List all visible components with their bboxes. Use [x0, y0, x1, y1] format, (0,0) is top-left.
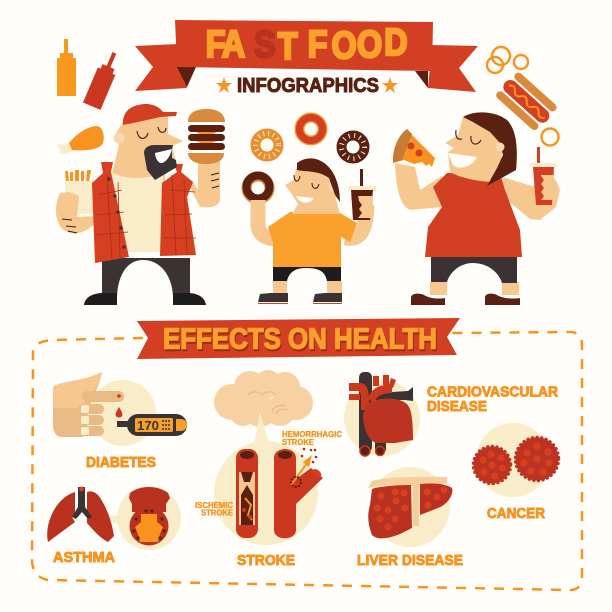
woman cup: [530, 147, 558, 205]
label: liver disease: LIVER DISEASE: [357, 553, 463, 569]
panel: liver disease: [368, 467, 452, 547]
left artery: [236, 449, 258, 538]
right artery: [274, 448, 323, 538]
man eyes: [137, 127, 166, 138]
woman eyes: [456, 130, 481, 144]
woman arms: [395, 163, 560, 220]
section frame: [32, 332, 582, 590]
icon: chicken leg: [57, 126, 104, 154]
label: stroke: STROKE: [237, 553, 295, 569]
woman ear: [496, 142, 504, 152]
woman dress: [425, 173, 522, 257]
man shoes: [84, 293, 206, 305]
woman shoes: [411, 294, 520, 305]
icon: onion rings: [487, 47, 558, 146]
woman head: [445, 117, 503, 182]
kid ear: [328, 182, 338, 192]
woman legs: [430, 282, 519, 295]
cancer cell right: [516, 438, 558, 480]
kid cup: [348, 169, 376, 220]
heart: [349, 372, 413, 456]
label: diabetes: DIABETES: [86, 455, 156, 471]
icon: burger: [188, 109, 225, 164]
man vest: [92, 162, 196, 263]
glucose meter: 170: [137, 419, 159, 433]
airway closeup: [129, 487, 170, 546]
icon: pizza slice: [393, 129, 435, 167]
character: kid: [258, 158, 376, 304]
kid shorts: [273, 266, 341, 281]
panel: cancer: [474, 423, 558, 497]
character: woman: [395, 112, 560, 305]
icon: fries: [65, 170, 93, 214]
lungs: [47, 486, 114, 542]
label: cardiovascular disease: DISEASE: [427, 399, 487, 415]
liver: [368, 483, 452, 538]
label: cardiovascular disease: [427, 384, 558, 415]
panel: cardiovascular disease: [344, 372, 420, 456]
label: hemorrhagic stroke: HEMORRHAGIC: [282, 429, 342, 439]
kid shoes: [258, 293, 342, 302]
panel: asthma: [47, 486, 181, 550]
kid arms: [258, 200, 367, 238]
icon: red donut: [300, 118, 322, 140]
woman shorts: [431, 256, 517, 283]
woman mouth: [448, 153, 477, 168]
bile ducts: [368, 477, 447, 526]
section banner: effects on health: EFFECTS ON HEALTH: [163, 324, 437, 356]
subtitle: INFOGRAPHICS: [237, 75, 379, 97]
icon: chocolate sprinkle donut: [342, 136, 364, 158]
man neck and shirt: [110, 145, 165, 252]
icon: blood drop: [116, 407, 122, 418]
icon: ketchup bottle: [83, 49, 123, 110]
label: hemorrhagic stroke: STROKE: [282, 437, 314, 447]
woman hair: [463, 112, 517, 186]
kid mouth: [296, 196, 314, 203]
panel: stroke: [195, 370, 342, 545]
label: asthma: ASTHMA: [53, 550, 116, 566]
cancer cell left: [474, 446, 510, 484]
label: hemorrhagic stroke: [282, 429, 342, 447]
icon: mustard bottle: [57, 39, 76, 96]
man beard and mouth: [144, 145, 177, 180]
label: ischemic stroke: [195, 500, 233, 518]
title banner: [135, 20, 478, 92]
character: man: [56, 104, 220, 305]
kid eye: [294, 175, 319, 188]
man arms: [56, 158, 220, 233]
label: ischemic stroke: STROKE: [201, 508, 233, 518]
icon: chocolate donut: [246, 176, 270, 200]
kid shirt: [268, 212, 357, 267]
man hand lines: [62, 173, 219, 233]
title text: FAST FOOD: [206, 22, 408, 68]
icon: orange donut: [256, 134, 278, 156]
brain: [214, 370, 313, 427]
kid hair: [297, 158, 340, 202]
icon: hot dog: [494, 70, 559, 133]
hand: [53, 372, 124, 437]
man pants: [102, 258, 190, 296]
kid legs: [273, 281, 342, 294]
man cap: [123, 104, 177, 125]
section banner: effects on health: EFFECTS ON HEALTH: [164, 326, 438, 358]
label: ischemic stroke: ISCHEMIC: [195, 500, 233, 510]
kid head: [285, 164, 340, 214]
man head: [116, 112, 183, 178]
label: cancer: CANCER: [487, 506, 545, 522]
man ear: [114, 132, 124, 144]
label: cardiovascular disease: CARDIOVASCULAR: [427, 384, 558, 400]
brain pointer: [253, 412, 271, 450]
panel: diabetes: [53, 372, 187, 446]
